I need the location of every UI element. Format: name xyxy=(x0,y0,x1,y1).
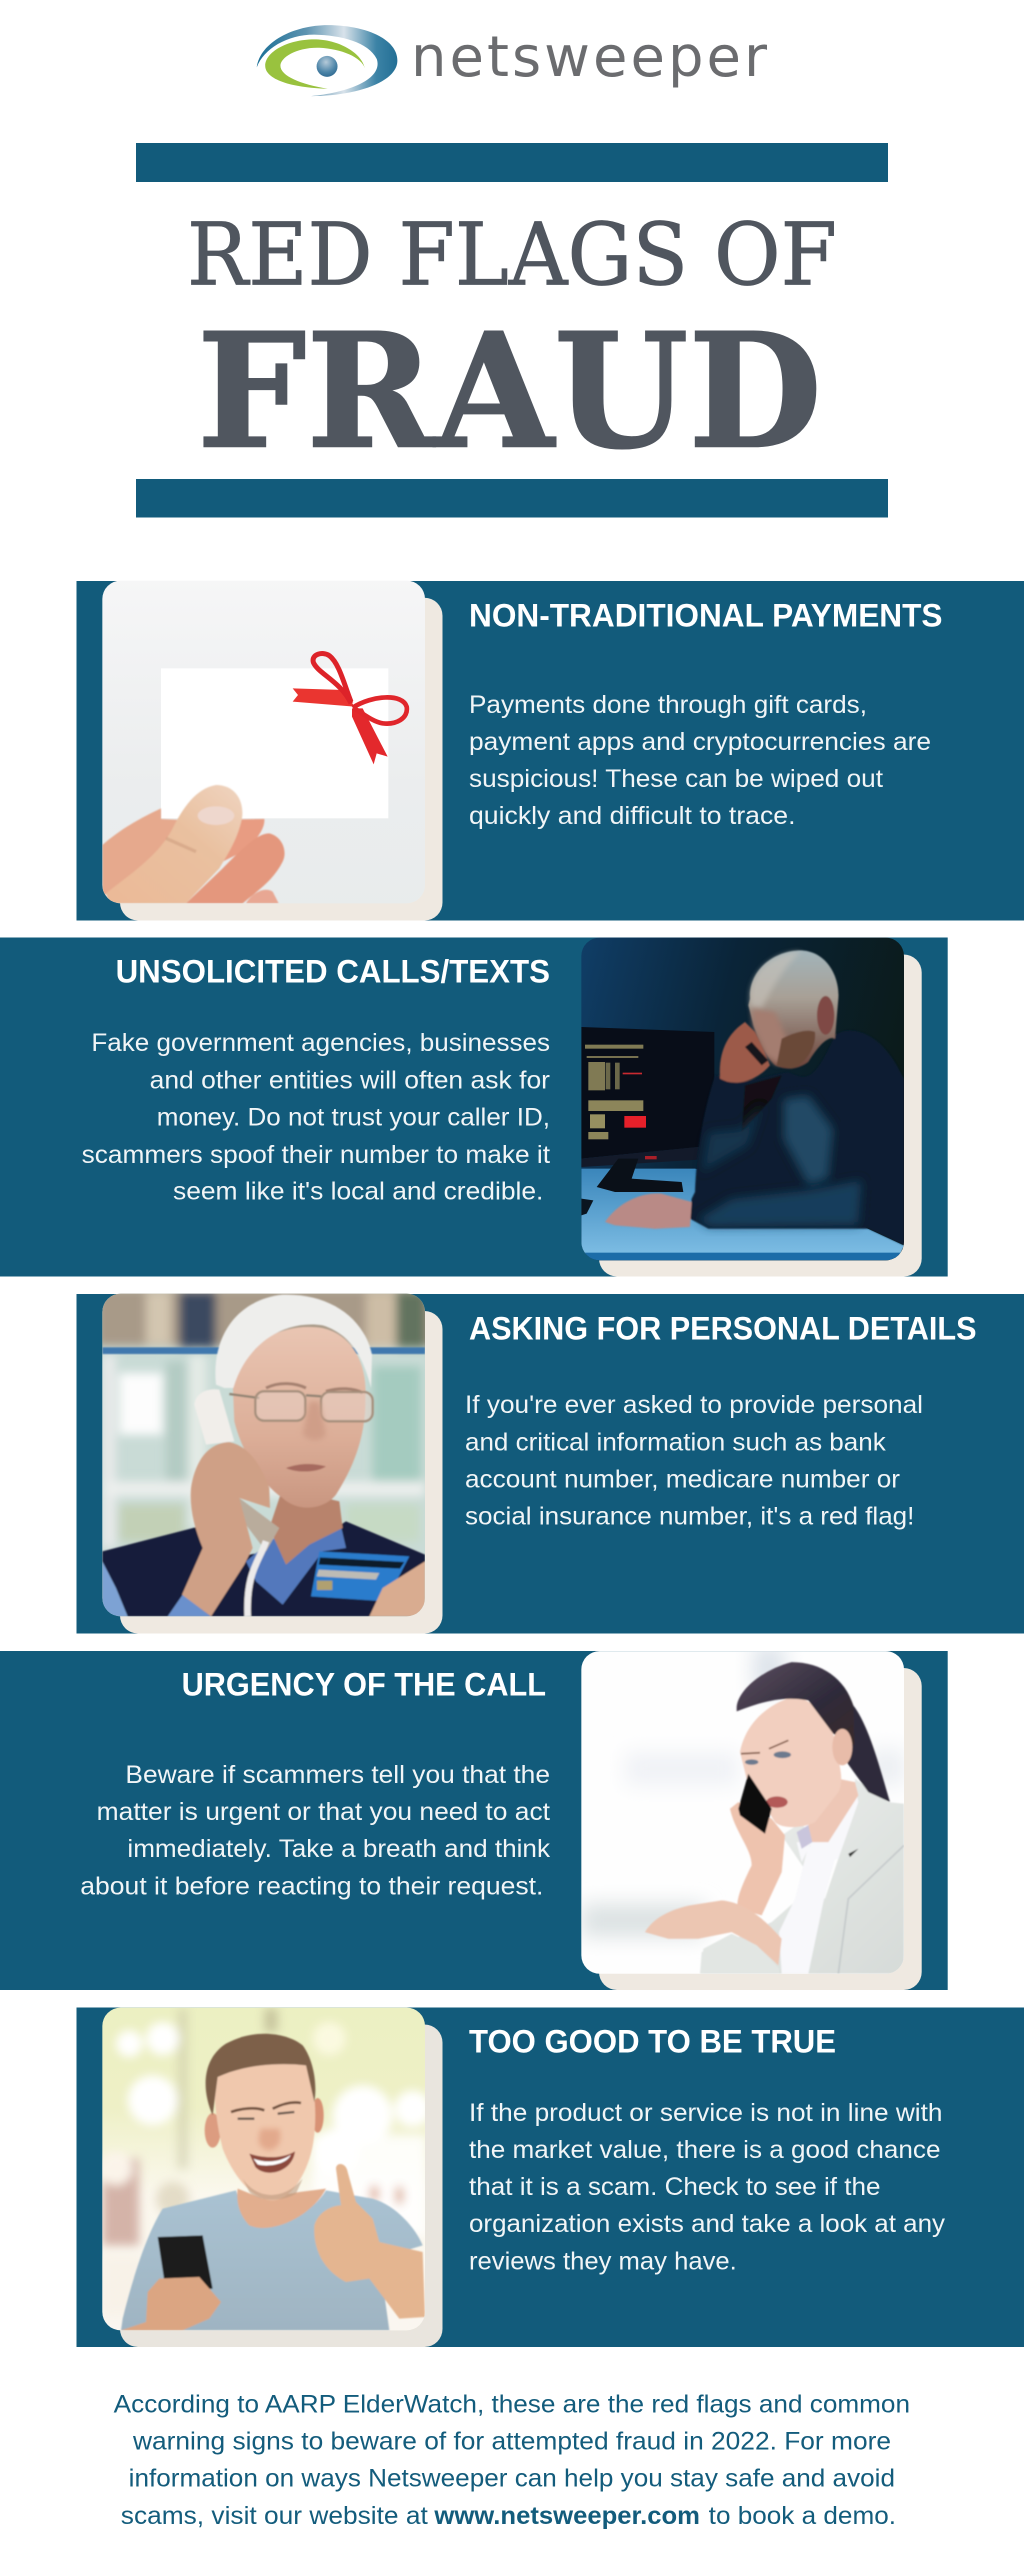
image backing card xyxy=(120,1311,442,1634)
body text xyxy=(469,691,931,830)
footer text: information on ways Netsweeper can help you stay safe and avoid xyxy=(129,2465,895,2493)
body text: quickly and difficult to trace. xyxy=(469,802,796,830)
body text: Fake government agencies, businesses xyxy=(91,1029,550,1057)
photo: man on phone at computer xyxy=(581,938,904,1260)
heading: TOO GOOD TO BE TRUE xyxy=(469,2024,836,2060)
image backing card xyxy=(599,1668,922,1990)
panel: too good to be true xyxy=(76,2002,1024,2352)
photo: smiling man with phone and thumbs up xyxy=(102,2008,425,2330)
bottom title bar xyxy=(136,479,888,518)
body text: and other entities will often ask for xyxy=(150,1066,550,1094)
body text: that it is a scam. Check to see if the xyxy=(469,2173,880,2201)
top title bar xyxy=(136,143,888,182)
heading: URGENCY OF THE CALL xyxy=(182,1666,546,1702)
heading: UNSOLICITED CALLS/TEXTS xyxy=(116,954,550,990)
photo: elderly man with phone and credit card xyxy=(102,1294,425,1616)
photo: shocked woman on phone xyxy=(581,1651,904,1974)
body text: money. Do not trust your caller ID, xyxy=(157,1104,550,1132)
icon: netsweeper eye xyxy=(257,25,397,96)
heading: ASKING FOR PERSONAL DETAILS xyxy=(469,1310,976,1346)
body text: scammers spoof their number to make it xyxy=(82,1141,550,1169)
panel: urgency of the call xyxy=(0,1645,948,1995)
body text xyxy=(465,1391,923,1531)
body text: immediately. Take a breath and think xyxy=(127,1835,551,1863)
body text xyxy=(80,1761,551,1900)
panel: unsolicited calls/texts xyxy=(0,932,948,1282)
panel: asking for personal details xyxy=(76,1288,1024,1638)
body text: payment apps and cryptocurrencies are xyxy=(469,728,931,756)
body text: the market value, there is a good chance xyxy=(469,2136,940,2164)
footer text: to book a demo. xyxy=(709,2502,896,2530)
body text: about it before reacting to their request. xyxy=(80,1872,543,1900)
title xyxy=(187,206,837,484)
body text: organization exists and take a look at any xyxy=(469,2210,946,2238)
body text: matter is urgent or that you need to act xyxy=(97,1798,550,1826)
body text: and critical information such as bank xyxy=(465,1428,886,1456)
body text: If the product or service is not in line with xyxy=(469,2099,942,2127)
heading: NON-TRADITIONAL PAYMENTS xyxy=(469,598,942,634)
body text: suspicious! These can be wiped out xyxy=(469,765,883,793)
panel: non-traditional payments xyxy=(76,575,1024,925)
title line: fraud: FRAUD xyxy=(197,300,822,484)
footer text: scams, visit our website at xyxy=(121,2502,428,2530)
body text: reviews they may have. xyxy=(469,2247,737,2275)
body text: account number, medicare number or xyxy=(465,1466,900,1494)
body text: seem like it's local and credible. xyxy=(173,1178,543,1206)
logo wordmark: netsweeper xyxy=(411,25,768,90)
body text: If you're ever asked to provide personal xyxy=(465,1391,923,1419)
body text: social insurance number, it's a red flag! xyxy=(465,1503,914,1531)
body text xyxy=(82,1029,550,1206)
body text xyxy=(469,2099,946,2275)
photo: hand holding gift card xyxy=(102,581,425,904)
body text: Payments done through gift cards, xyxy=(469,691,867,719)
title line: red flags of: RED FLAGS OF xyxy=(187,206,837,306)
image backing card xyxy=(120,2024,442,2347)
footer text: According to AARP ElderWatch, these are the red flags and common xyxy=(114,2390,910,2418)
logo: netsweeper xyxy=(257,25,768,96)
footer text: warning signs to beware of for attempted fraud in 2022. For more xyxy=(132,2428,891,2456)
footer text xyxy=(114,2390,910,2530)
body text: Beware if scammers tell you that the xyxy=(125,1761,550,1789)
footer text: www.netsweeper.com xyxy=(433,2502,700,2530)
image backing card xyxy=(120,598,442,920)
image backing card xyxy=(599,954,922,1276)
